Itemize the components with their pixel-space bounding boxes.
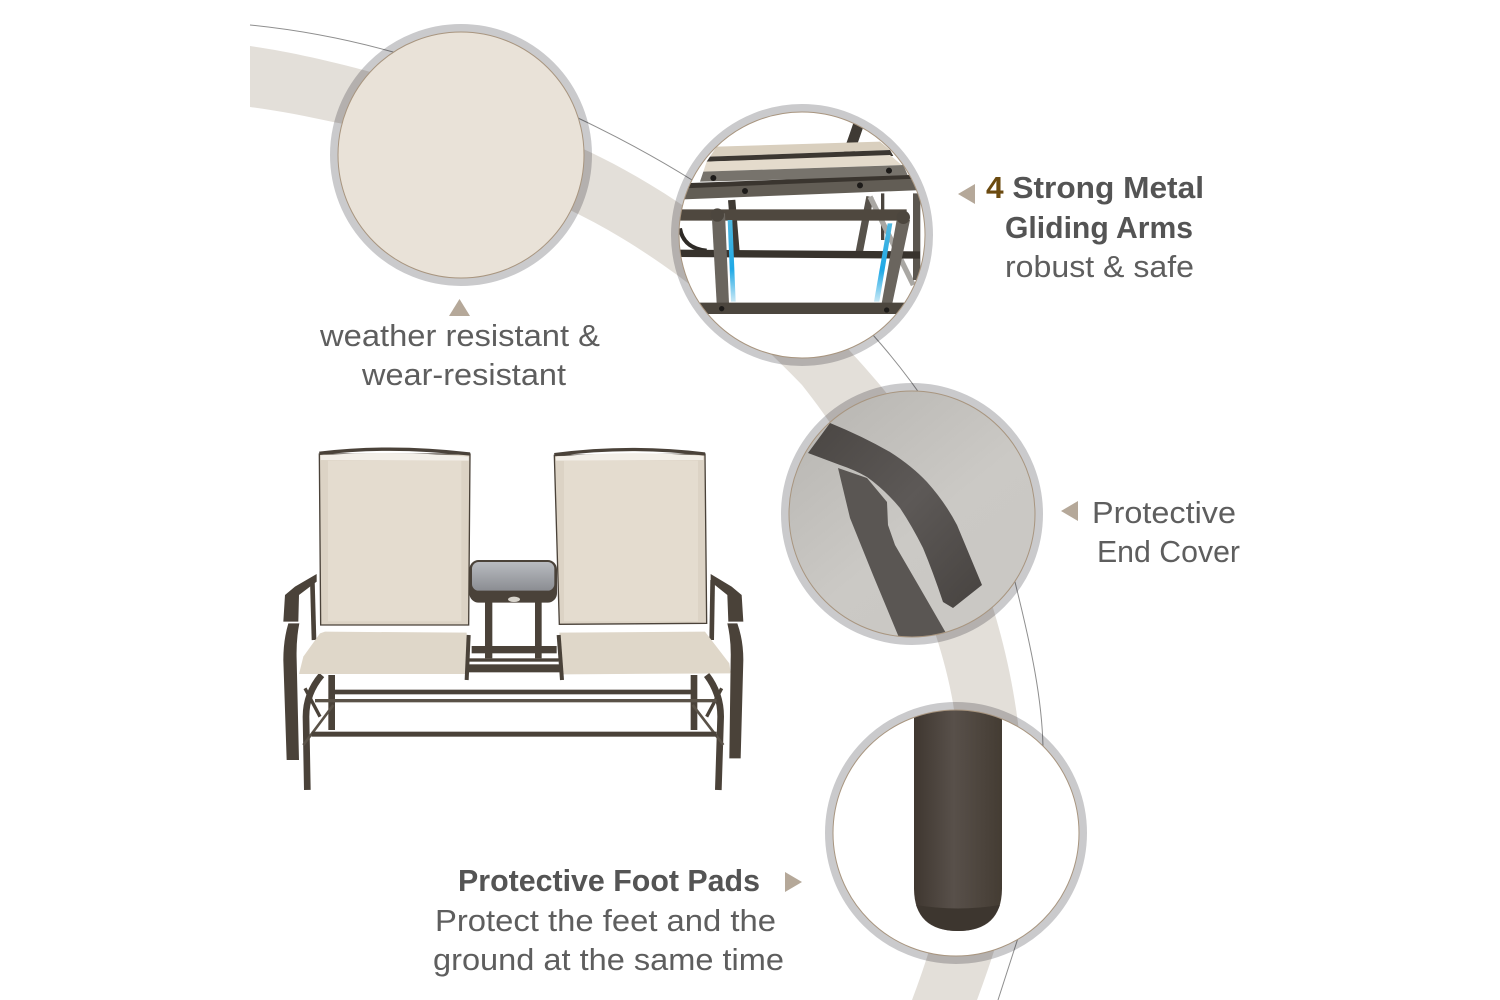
arrow: toward foot pad <box>785 872 802 892</box>
caption: weather resistant: wear-resistant <box>361 357 566 392</box>
caption: weather resistant: weather resistant & <box>319 318 600 353</box>
arrow: toward end cover <box>1061 501 1078 521</box>
decorative curved band <box>250 46 1022 1000</box>
caption: protective end cover: Protective <box>1092 495 1236 530</box>
circle: foot pad detail <box>829 700 1083 960</box>
caption: protective end cover <box>1092 495 1240 569</box>
side table <box>468 560 561 672</box>
circle: protective end cover detail <box>785 387 1039 641</box>
thin connecting arc <box>250 25 1043 1000</box>
arrow: up to fabric <box>449 299 470 316</box>
right frame and seat <box>559 574 743 790</box>
right back rest <box>554 449 707 624</box>
caption: protective end cover: End Cover <box>1097 534 1240 569</box>
arrow: toward gliding arms <box>958 184 975 204</box>
product: double glider bench with table <box>283 449 743 790</box>
circle: gliding arms detail <box>673 108 929 362</box>
caption: protective foot pads <box>433 863 784 977</box>
caption: protective foot pads: ground at the same time <box>433 942 784 977</box>
caption: 4 strong metal gliding arms <box>986 170 1204 284</box>
left back rest <box>319 449 470 625</box>
circle: fabric detail <box>334 28 588 282</box>
caption: weather resistant <box>319 318 600 392</box>
lower rails <box>312 690 717 737</box>
left frame and seat <box>283 574 469 790</box>
caption: 4 strong metal gliding arms: Gliding Arms <box>1005 210 1193 245</box>
caption: protective foot pads: Protect the feet and the <box>435 903 776 938</box>
caption: protective foot pads: Protective Foot Pads <box>458 863 760 898</box>
caption: 4 strong metal gliding arms: robust & safe <box>1005 249 1194 284</box>
caption: 4 strong metal gliding arms: 4 Strong Metal <box>986 170 1204 205</box>
